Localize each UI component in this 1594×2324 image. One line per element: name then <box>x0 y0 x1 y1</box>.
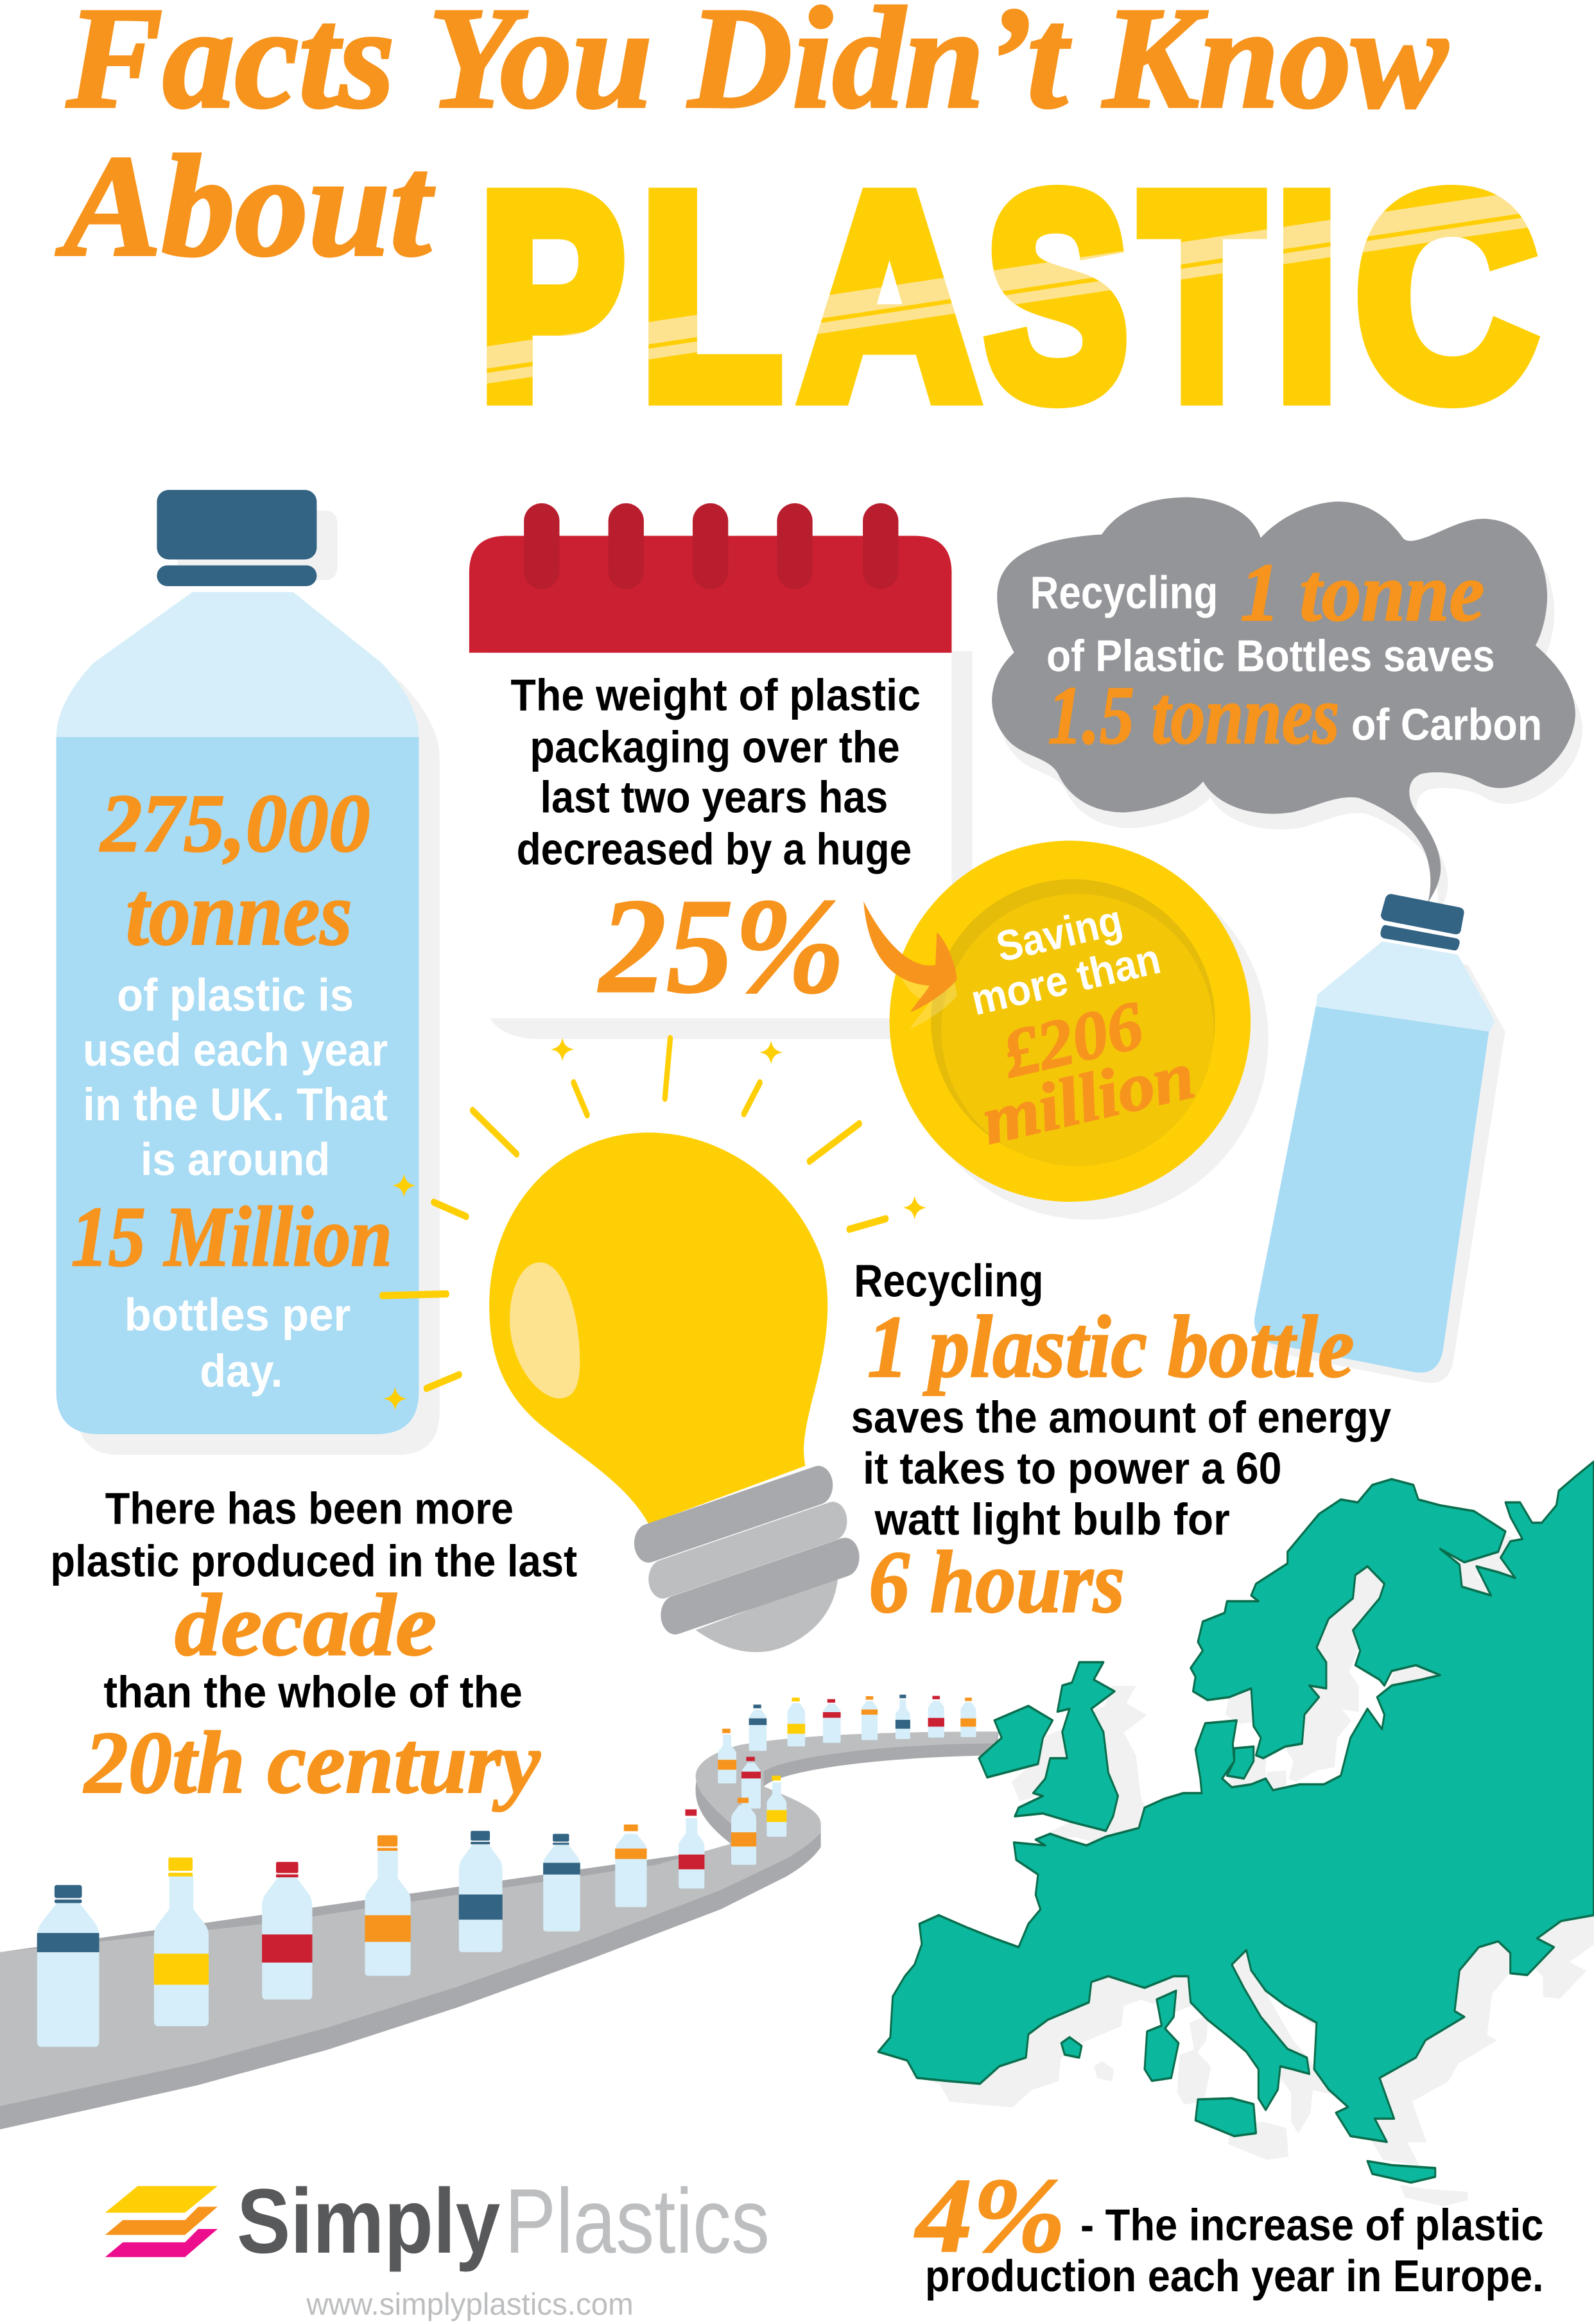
cloud text: 1 tonne <box>1240 546 1484 638</box>
text: 4% increase: 4% <box>914 2156 1066 2275</box>
bottle 8 <box>679 1809 704 1889</box>
text: plastic produced in last decade: decade <box>175 1575 437 1674</box>
gold coin <box>890 840 1269 1220</box>
bulb sparkles <box>383 1037 926 1410</box>
coin text: £206 <box>995 986 1150 1092</box>
bottle 19 <box>960 1697 976 1737</box>
bottle 1 <box>37 1885 99 2047</box>
text: recycling 1 plastic bottle: watt light bulb for <box>874 1495 1230 1545</box>
logo: Simply Plastics: Simply <box>237 2171 500 2273</box>
bottle 12 <box>718 1729 736 1783</box>
text: 4% increase <box>914 2156 1544 2301</box>
panel: speech cloud <box>992 498 1582 919</box>
logo: Simply Plastics: Plastics <box>505 2171 770 2273</box>
calendar binder pegs <box>524 503 898 589</box>
text: 4% increase: production each year in Europe. <box>925 2251 1544 2301</box>
bottle 5 <box>459 1831 503 1952</box>
text: plastic produced in last decade: 20th century <box>83 1713 541 1812</box>
bottle statistic text: is around <box>141 1134 330 1186</box>
light bulb <box>382 1037 926 1652</box>
calendar text <box>510 670 921 1021</box>
title: Facts You Didn't Know About <box>56 0 1448 286</box>
text: recycling 1 plastic bottle: it takes to power a 60 <box>863 1443 1282 1493</box>
calendar text: last two years has <box>541 772 888 822</box>
text: recycling 1 plastic bottle: 6 hours <box>869 1533 1125 1631</box>
bottles on the road <box>37 1695 976 2047</box>
bottle 10 <box>767 1776 786 1837</box>
text: recycling 1 plastic bottle: saves the amount of energy <box>851 1392 1392 1443</box>
coin text: more than <box>967 935 1165 1025</box>
bottle statistic text: used each year <box>83 1025 388 1076</box>
cloud text: 1.5 tonnes <box>1048 669 1339 761</box>
bottle statistic text: 275,000 <box>100 777 370 869</box>
bottle 15 <box>823 1699 841 1743</box>
title: Facts You Didn't Know About: About <box>56 126 435 286</box>
bottle statistic text: in the UK. That <box>83 1079 388 1131</box>
calendar text: The weight of plastic <box>510 670 921 720</box>
bottle statistic text: bottles per <box>125 1290 351 1341</box>
cloud text: Recycling <box>1030 568 1218 619</box>
bottle 9 <box>731 1798 756 1865</box>
calendar text: 25% <box>598 871 845 1021</box>
cloud text <box>1030 546 1542 761</box>
title: PLASTIC: I <box>1276 135 1338 458</box>
bottle 17 <box>896 1695 910 1739</box>
bottle 6 <box>543 1834 580 1932</box>
map of Europe: land <box>878 1462 1593 2183</box>
text: 4% increase: - The increase of plastic <box>1080 2199 1544 2250</box>
coin text <box>967 896 1201 1159</box>
website url: www.simplyplastics.com <box>306 2287 634 2322</box>
title: PLASTIC: L <box>641 135 781 458</box>
title: PLASTIC: P <box>480 135 625 458</box>
cloud text: of Plastic Bottles saves <box>1046 631 1495 681</box>
tilted recycling bottle <box>1254 894 1505 1383</box>
bottle 7 <box>615 1825 646 1907</box>
title: PLASTIC <box>487 185 1541 408</box>
bottle statistic text: day. <box>200 1346 282 1397</box>
map shadow <box>911 1486 1594 2207</box>
text: plastic produced in last decade: There has been more <box>105 1483 514 1533</box>
text: plastic produced in last decade <box>50 1483 577 1812</box>
bottle statistic text: of plastic is <box>117 970 354 1021</box>
bottle 14 <box>788 1697 805 1746</box>
bottle statistic text <box>71 777 392 1397</box>
bottle 16 <box>862 1696 878 1740</box>
text: recycling 1 plastic bottle <box>851 1256 1392 1631</box>
calendar text: packaging over the <box>530 722 900 772</box>
bottle 11 <box>741 1757 761 1808</box>
bottle statistic text: tonnes <box>126 863 352 964</box>
title: PLASTIC: S <box>985 135 1128 458</box>
orange arrow <box>863 901 957 1028</box>
conveyor road <box>0 1731 999 2129</box>
coin text: Saving <box>992 896 1127 971</box>
bulb rays <box>382 1039 886 1389</box>
calendar text: decreased by a huge <box>517 824 912 874</box>
text: plastic produced in last decade: than the whole of the <box>103 1667 523 1717</box>
bottle 4 <box>365 1835 411 1976</box>
title: PLASTIC: T <box>1141 135 1263 458</box>
panel: calendar <box>469 503 973 1039</box>
logo: Simply Plastics <box>105 2171 770 2273</box>
text: recycling 1 plastic bottle: 1 plastic bottle <box>867 1297 1354 1396</box>
bottle 3 <box>262 1862 312 2000</box>
cloud text: of Carbon <box>1351 700 1542 750</box>
title: PLASTIC: C <box>1356 135 1536 458</box>
bottle 18 <box>928 1696 944 1738</box>
bottle 13 <box>749 1704 767 1751</box>
bottle statistic text: 15 Million <box>71 1189 392 1284</box>
text: plastic produced in last decade: plastic produced in the last <box>50 1536 577 1586</box>
logo icon layers <box>105 2186 218 2257</box>
panel: large water bottle <box>56 490 440 1455</box>
title: PLASTIC: A <box>801 135 978 458</box>
bottle 2 <box>154 1857 209 2026</box>
coin text: million <box>975 1036 1201 1159</box>
text: recycling 1 plastic bottle: Recycling <box>854 1256 1043 1307</box>
